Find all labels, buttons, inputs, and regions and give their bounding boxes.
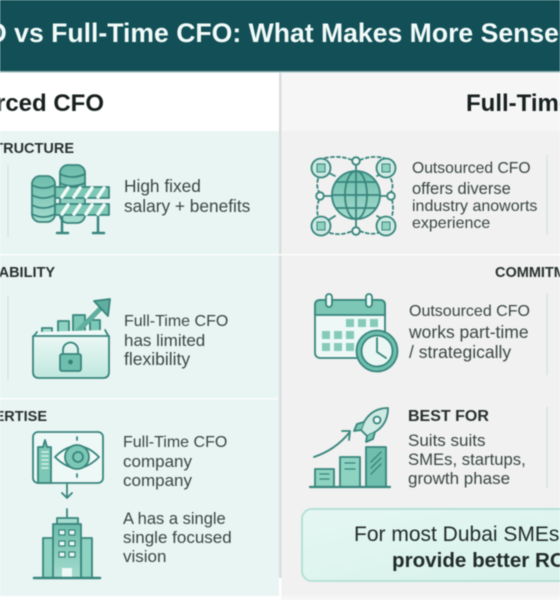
icon: calendar with clock [315,294,398,372]
text: works part-time: / strategically [409,342,511,362]
text: best for: Suits suits [408,431,485,450]
text: high fixed salary: High fixed [124,176,201,196]
text: outsourced diverse experience: experience [412,215,490,232]
column separator [279,73,282,578]
icon: office building [34,509,100,578]
text: full-time company: company [123,452,192,471]
callout: conclusion [302,509,560,581]
icon: coin stacks and barricade [32,165,109,233]
column dividers [8,155,547,488]
text: single focused vision: single focused [123,528,232,547]
text: full-time company: company [123,471,192,490]
text: limited flexibility: has limited [124,331,205,350]
text: full-time company: Full-Time CFO [123,434,227,451]
text: outsourced diverse experience: Outsourced CFO [412,160,531,177]
text: single focused vision: A has a single [123,510,226,528]
text: outsourced diverse experience: industry anoworts [412,198,537,215]
icon: eye and tower [33,432,103,498]
text: high fixed salary: salary + benefits [124,196,251,216]
section background: left column [0,131,279,596]
text: single focused vision: vision [123,547,166,566]
text: best for: BEST FOR [408,408,489,425]
text: best for: growth phase [408,469,510,488]
icon: growth chart and lock [33,299,110,378]
text: works part-time: works part-time [408,322,529,342]
icon: rocket and rising city [310,408,390,487]
text: works part-time: Outsourced CFO [409,303,530,320]
text: outsourced diverse experience: offers diverse [412,180,511,198]
row separators [0,254,560,400]
text: best for: SMEs, startups, [408,450,526,469]
text: best for [408,408,526,488]
text: limited flexibility: Full-Time CFO [124,313,228,330]
header band [0,0,560,72]
text: limited flexibility: flexibility [124,349,190,369]
icon: globe network [312,157,396,236]
section background: right column [282,131,560,596]
